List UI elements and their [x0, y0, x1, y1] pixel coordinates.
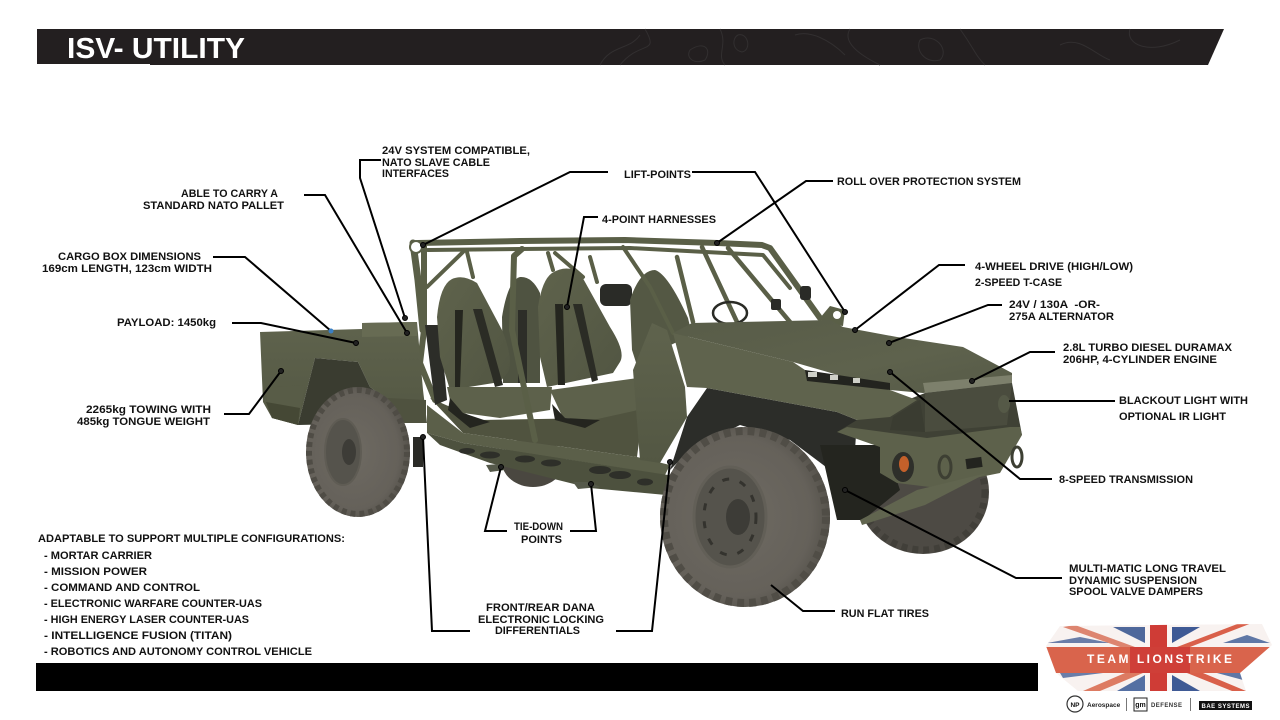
- label: alternator: 24V / 130A -OR-: [1009, 299, 1100, 311]
- NP Aerospace logo: NP: [1070, 702, 1080, 709]
- configurations list: - MISSION POWER: [44, 566, 147, 578]
- front fascia grille: [890, 375, 1012, 432]
- label: suspension: DYNAMIC SUSPENSION: [1069, 575, 1197, 587]
- BAE Systems logo: [1199, 701, 1252, 710]
- GM Defense logo: [1134, 698, 1182, 711]
- label: differentials: DIFFERENTIALS: [495, 625, 580, 637]
- hood: [673, 320, 1012, 420]
- rear wheel: [306, 387, 410, 517]
- cargo box: [260, 322, 427, 425]
- label: engine: 2.8L TURBO DIESEL DURAMAX: [1063, 342, 1233, 354]
- label: blackout light: OPTIONAL IR LIGHT: [1119, 411, 1226, 423]
- label: 24V system: INTERFACES: [382, 168, 449, 180]
- configurations list: - COMMAND AND CONTROL: [44, 582, 200, 594]
- label: towing: [77, 404, 211, 428]
- interior: [425, 325, 447, 405]
- label: harnesses: 4-POINT HARNESSES: [602, 214, 716, 226]
- seat rail tube: [623, 247, 673, 333]
- label: transmission: 8-SPEED TRANSMISSION: [1059, 474, 1193, 486]
- door panel: [633, 323, 687, 463]
- label: 24V system: 24V SYSTEM COMPATIBLE,: [382, 145, 530, 157]
- label: suspension: MULTI-MATIC LONG TRAVEL: [1069, 563, 1226, 575]
- logo: Team Lionstrike: [1040, 620, 1280, 712]
- vehicle floor: [430, 395, 645, 457]
- label: differentials: FRONT/REAR DANA: [486, 602, 595, 614]
- configurations list: ADAPTABLE TO SUPPORT MULTIPLE CONFIGURATIONS:: [38, 533, 345, 545]
- rocker panel: [413, 405, 670, 495]
- label: suspension: [1069, 563, 1226, 598]
- title: ISV- UTILITY: [67, 33, 245, 65]
- label: engine: [1063, 342, 1233, 366]
- label: tie-down points: POINTS: [521, 534, 562, 546]
- label: 4WD: 4-WHEEL DRIVE (HIGH/LOW): [975, 261, 1133, 273]
- configurations list: - MORTAR CARRIER: [44, 550, 152, 562]
- label: lift-points: LIFT-POINTS: [624, 169, 691, 181]
- BAE Systems logo: BAE SYSTEMS: [1202, 704, 1250, 710]
- configurations list: - ELECTRONIC WARFARE COUNTER-UAS: [44, 598, 262, 610]
- leader lines: [213, 160, 1115, 631]
- label: alternator: [1009, 299, 1114, 323]
- front seat: [538, 268, 638, 428]
- union flag: [1046, 624, 1272, 691]
- label: NATO pallet: [143, 188, 284, 212]
- label: 4WD: 2-SPEED T-CASE: [975, 277, 1062, 289]
- NP Aerospace logo: Aerospace: [1087, 702, 1121, 709]
- vehicle illustration: [260, 240, 1022, 607]
- configurations list: - INTELLIGENCE FUSION (TITAN): [44, 630, 232, 642]
- label: tie-down points: TIE-DOWN: [514, 521, 563, 533]
- label: differentials: ELECTRONIC LOCKING: [478, 614, 604, 626]
- front wheel: [660, 427, 830, 607]
- front bumper: [837, 427, 1022, 525]
- label: cargo box: CARGO BOX DIMENSIONS: [58, 251, 201, 263]
- label: towing: 2265kg TOWING WITH: [86, 404, 211, 416]
- label: cargo box: [42, 251, 212, 275]
- rear seat: [437, 277, 552, 428]
- far side wheels: [502, 430, 989, 554]
- label: blackout light: [1119, 395, 1248, 423]
- label: roll over protection: ROLL OVER PROTECTION SYSTEM: [837, 176, 1021, 188]
- configurations list: - HIGH ENERGY LASER COUNTER-UAS: [44, 614, 249, 626]
- far seats: [502, 270, 692, 383]
- label: 4WD: [975, 261, 1133, 289]
- label: 24V system: NATO SLAVE CABLE: [382, 157, 490, 169]
- label: NATO pallet: STANDARD NATO PALLET: [143, 200, 284, 212]
- bottom black bar: [36, 663, 1038, 691]
- steering wheel: [713, 302, 747, 324]
- label: tires: RUN FLAT TIRES: [841, 608, 929, 620]
- header bar: [37, 29, 1224, 65]
- roll cage front hoop: [512, 249, 535, 440]
- front fascia backing: [837, 383, 1022, 445]
- label: alternator: 275A ALTERNATOR: [1009, 311, 1114, 323]
- suspension: [820, 445, 900, 520]
- label: NATO pallet: ABLE TO CARRY A: [181, 188, 278, 200]
- roll cage rear: [410, 240, 845, 400]
- wheel arch: [670, 388, 857, 470]
- GM Defense logo: gm: [1135, 702, 1146, 709]
- label: differentials: [478, 602, 604, 637]
- label: engine: 206HP, 4-CYLINDER ENGINE: [1063, 354, 1217, 366]
- label: towing: 485kg TONGUE WEIGHT: [77, 416, 210, 428]
- label: suspension: SPOOL VALVE DAMPERS: [1069, 586, 1203, 598]
- configurations list: - ROBOTICS AND AUTONOMY CONTROL VEHICLE: [44, 646, 312, 658]
- NP Aerospace logo: [1067, 696, 1121, 712]
- band text: TEAM LIONSTRIKE: [1087, 652, 1232, 666]
- mirror mounts: [600, 284, 811, 310]
- GM Defense logo: DEFENSE: [1151, 703, 1182, 709]
- label: blackout light: BLACKOUT LIGHT WITH: [1119, 395, 1248, 407]
- configurations list: [38, 533, 345, 658]
- label: cargo box: 169cm LENGTH, 123cm WIDTH: [42, 263, 212, 275]
- label: payload: PAYLOAD: 1450kg: [117, 317, 216, 329]
- label: tie-down points: [514, 521, 563, 546]
- label: 24V system: [382, 145, 530, 180]
